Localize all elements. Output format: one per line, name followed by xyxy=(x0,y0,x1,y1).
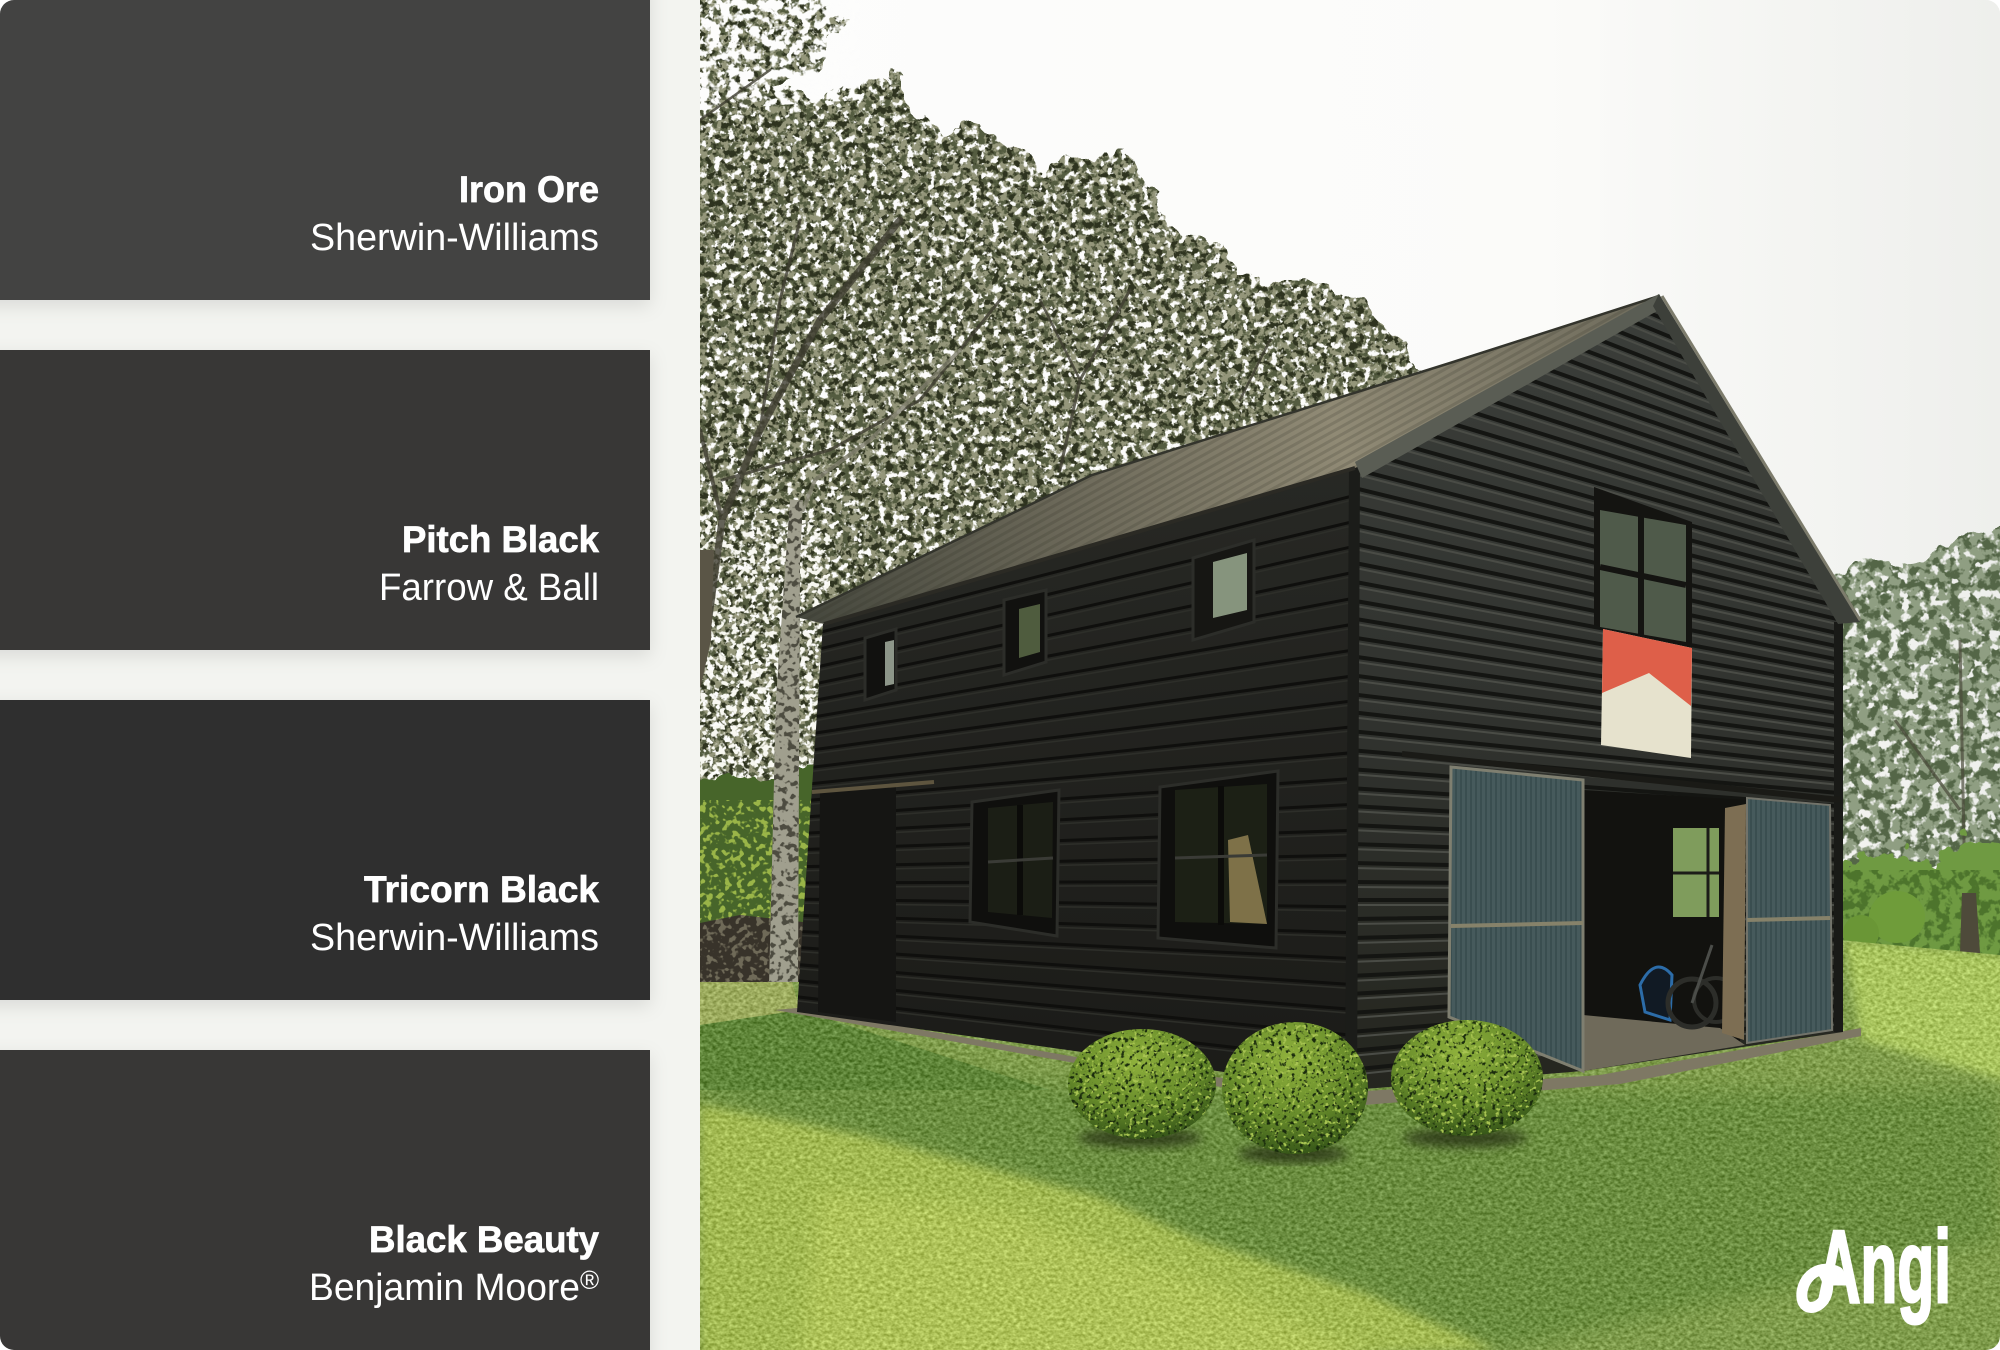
birch trunk xyxy=(769,500,803,985)
panel: Black Beauty swatch xyxy=(0,1050,650,1350)
front wall clapboard xyxy=(1357,313,1836,1074)
plinth and gravel xyxy=(775,1008,1861,1106)
root pile xyxy=(700,915,803,982)
window: side lower 2 xyxy=(1158,771,1278,948)
side wall xyxy=(790,468,1360,1090)
lawn xyxy=(680,930,2000,1350)
trees behind barn, left xyxy=(700,0,1422,982)
label: Benjamin Moore: Benjamin Moore xyxy=(309,1267,580,1309)
sliding door right xyxy=(1747,798,1832,1043)
side wall clapboard xyxy=(790,494,1360,1066)
shrub shadows xyxy=(1078,1129,1527,1163)
window: small side 1 xyxy=(865,629,896,700)
door jamb xyxy=(1722,804,1746,1040)
label: Iron Ore: Iron Ore xyxy=(459,169,599,210)
sliding door left xyxy=(1449,767,1583,1071)
window: small side 3 xyxy=(1193,540,1254,640)
label: Black Beauty: Black Beauty xyxy=(369,1219,599,1260)
concrete floor xyxy=(1583,1015,1745,1071)
low foliage xyxy=(700,764,814,923)
barn opening xyxy=(1583,790,1746,1071)
canopy xyxy=(700,0,1422,782)
door: small side door with rail xyxy=(812,782,934,1022)
label: Tricorn Black: Tricorn Black xyxy=(364,869,599,910)
window: small side 2 xyxy=(1004,590,1046,675)
shrub middle xyxy=(1222,1022,1368,1154)
tree branches xyxy=(700,70,1270,640)
sky xyxy=(700,0,1578,780)
tree, right xyxy=(1830,515,2000,960)
panel: Iron Ore swatch xyxy=(0,0,650,300)
label: Sherwin-Williams: Sherwin-Williams xyxy=(310,217,599,259)
interior window xyxy=(1673,828,1719,917)
panel: Pitch Black swatch xyxy=(0,350,650,650)
shrub left xyxy=(1068,1029,1216,1139)
label: Sherwin-Williams: Sherwin-Williams xyxy=(310,917,599,959)
barn quilt xyxy=(1601,629,1692,758)
shrub right xyxy=(1391,1020,1543,1136)
barn xyxy=(776,294,1861,1105)
window: side lower 1 xyxy=(970,790,1059,936)
left trunk xyxy=(700,550,714,690)
gable fascia xyxy=(1355,294,1666,478)
label: Pitch Black: Pitch Black xyxy=(402,519,599,560)
label: Benjamin Moore: ® xyxy=(580,1265,599,1295)
logo: Angi xyxy=(1802,1209,1951,1324)
right wall edge xyxy=(1834,622,1843,1032)
window: gable xyxy=(1594,487,1692,648)
roof xyxy=(796,294,1860,624)
corner board xyxy=(1345,466,1360,1090)
gable front wall xyxy=(1357,312,1843,1089)
distant foliage xyxy=(1835,840,2000,960)
panel: Tricorn Black swatch xyxy=(0,700,650,1000)
small bushes xyxy=(1869,891,1925,943)
door rail xyxy=(1402,754,1840,800)
bicycles xyxy=(1640,945,1738,1027)
right trunk xyxy=(1960,893,1980,953)
sparse gaps, lower left xyxy=(700,520,830,790)
label: Farrow & Ball: Farrow & Ball xyxy=(379,567,599,609)
sparse gaps, upper left xyxy=(700,0,860,110)
photo: black barn on lawn xyxy=(660,0,2000,1350)
